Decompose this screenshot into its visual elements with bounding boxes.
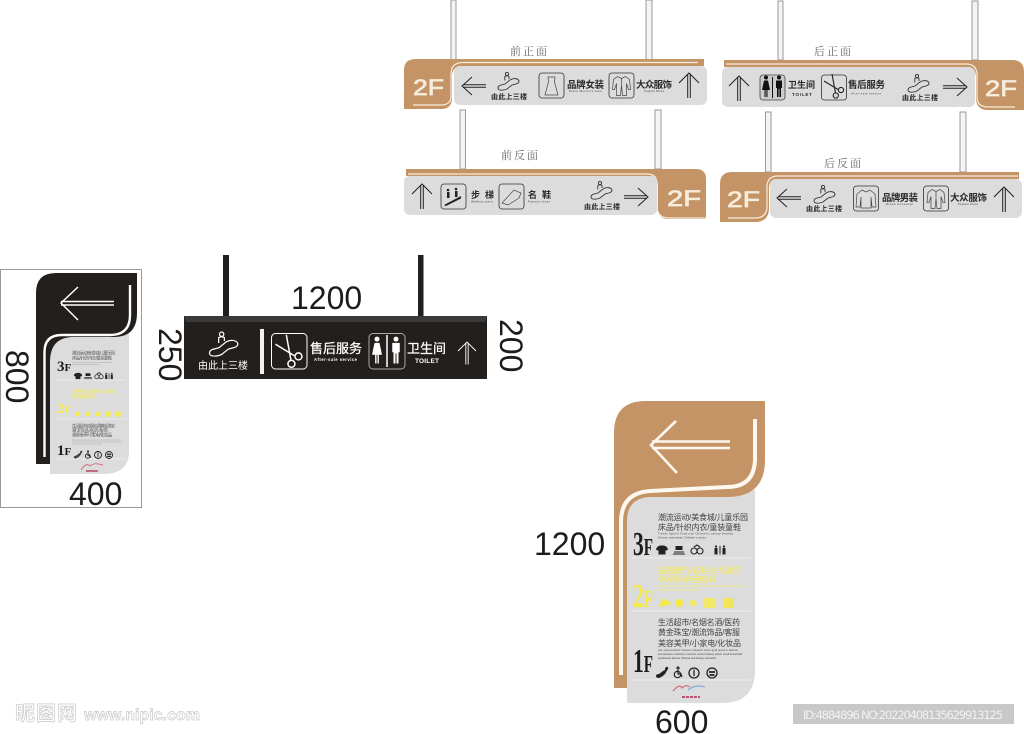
small black totem in frame: 休闲体验/箱包 <box>72 393 97 400</box>
top sign: front face (前正面) <box>404 0 707 109</box>
floor 3F: Trendy Sports/ Food city/ Children's outing/ bedding <box>658 532 734 536</box>
small black totem in frame: 2F <box>57 401 72 417</box>
floor 2F (yellow) <box>633 565 746 615</box>
floor 1F: accessories/ medicine/ customer center/ beauty salon/ small household <box>658 652 743 656</box>
large bronze totem <box>614 401 765 703</box>
top sign: front reverse (前反面): Walking stairs <box>471 200 494 204</box>
top sign: rear face (后正面): 后正面 <box>814 43 851 59</box>
small black totem in frame: 品牌服饰/名鞋/大众服饰 <box>72 388 116 395</box>
small black totem in frame: 1F <box>57 443 72 459</box>
top sign: rear reverse (后反面): 由此上三楼 <box>806 204 842 213</box>
floor 3F <box>633 512 748 563</box>
black hanging sign: After-sale service <box>314 357 358 362</box>
black hanging sign: 由此上三楼 <box>198 359 248 372</box>
top sign: rear face (后正面): 由此上三楼 <box>902 93 938 102</box>
floor 2F (yellow): 休闲体验/箱包皮具 <box>658 574 716 584</box>
top sign: rear reverse (后反面) <box>720 112 1022 222</box>
watermark: nipic: 昵图网 <box>15 703 77 725</box>
top sign: front face (前正面): 由此上三楼 <box>491 92 527 101</box>
floor 1F: 美容美甲/小家电/化妆品 <box>658 638 741 648</box>
id bar <box>793 704 1014 724</box>
brand logo <box>673 686 705 697</box>
top sign: rear reverse (后反面): Brand menswear <box>886 202 913 206</box>
watermark: nipic <box>15 703 200 725</box>
top sign: front reverse (前反面): 名 鞋 <box>528 189 551 200</box>
top sign: front face (前正面): 大众服饰 <box>636 79 672 91</box>
top sign: front face (前正面): 前正面 <box>510 43 547 59</box>
top sign: front face (前正面): Popular Dress <box>644 89 665 93</box>
floor 2F (yellow): 品牌服饰/名鞋/大众服饰 <box>658 565 742 575</box>
black hanging sign: TOILET <box>415 358 439 365</box>
small black totem in frame: 3F <box>57 359 72 375</box>
floor 1F: 黄金珠宝/潮流饰品/客服 <box>658 627 740 637</box>
floor 3F: 3F <box>633 526 653 563</box>
floor 3F: 潮流运动/美食城/儿童乐园 <box>658 512 748 522</box>
floor 1F <box>633 617 743 680</box>
floor 3F: 床品/针织内衣/童装童鞋 <box>658 522 741 532</box>
top sign: front face (前正面): 品牌女装 <box>567 79 604 91</box>
small black totem in frame: 美容美甲/小家电/化妆品 <box>72 432 112 438</box>
floor 1F: Life supermarket/ Famous tobacco/ wine/ gold jewelry/ fashion <box>658 648 739 652</box>
small black totem in frame <box>0 270 142 508</box>
dimension: 400: 400 <box>69 476 122 512</box>
black hanging sign: 售后服务 <box>310 341 362 356</box>
dimension: 250: 250 <box>152 328 188 381</box>
floor 2F (yellow): 2F <box>633 578 653 615</box>
top sign: rear reverse (后反面): 2F <box>727 187 760 212</box>
small black totem in frame: 潮流饰品/医药/服饰 <box>72 427 109 434</box>
top sign: front reverse (前反面) <box>404 110 706 219</box>
top sign: rear reverse (后反面): Popular Dress <box>958 202 979 206</box>
id bar: ID:4884896 NO:20220408135629913125 <box>803 708 1003 722</box>
top sign: rear face (后正面): 卫生间 <box>788 79 815 90</box>
top sign: front reverse (前反面): 由此上三楼 <box>584 202 620 211</box>
small black totem in frame: 床品/针织内衣/童装童鞋 <box>72 354 113 362</box>
floor 1F: 1F <box>633 643 653 680</box>
floor 3F: Knitted underwear/ Children's shoes <box>658 536 707 540</box>
watermark: nipic: www.nipic.com <box>83 707 200 724</box>
dimension: 1200 beside totem: 1200 <box>534 526 605 562</box>
floor 1F: appliances/ famous Chinese and foreign cosmetics <box>658 656 717 660</box>
top sign: front reverse (前反面): 前反面 <box>501 147 538 163</box>
top sign: rear reverse (后反面): 品牌男装 <box>882 192 918 204</box>
black hanging sign <box>184 255 487 379</box>
top sign: front reverse (前反面): 步 梯 <box>471 189 494 200</box>
black hanging sign: 卫生间 <box>407 341 446 356</box>
small black totem in frame: 生活超市/名烟名酒/黄金珠宝 <box>72 422 116 430</box>
top sign: rear face (后正面): After-sale service <box>851 92 881 96</box>
top sign: rear face (后正面) <box>722 1 1024 110</box>
top sign: rear face (后正面): 售后服务 <box>848 79 885 91</box>
dimension: 800: 800 <box>0 350 35 403</box>
top sign: front face (前正面): Brand Women's wear <box>569 89 602 93</box>
top sign: rear reverse (后反面): 后反面 <box>824 155 861 171</box>
dimension: 1200 over black sign: 1200 <box>291 280 362 316</box>
top sign: rear reverse (后反面): 大众服饰 <box>950 192 987 204</box>
top sign: front reverse (前反面): Famous shoes <box>528 200 551 204</box>
top sign: rear face (后正面): 2F <box>985 76 1017 101</box>
top sign: front reverse (前反面): 2F <box>667 186 701 211</box>
dimension: 200: 200 <box>493 319 529 372</box>
top sign: front face (前正面): 2F <box>413 75 444 100</box>
floor 1F: 生活超市/名烟名酒/医药 <box>658 617 740 627</box>
small black totem in frame: 潮流运动/美食城/儿童乐园 <box>72 350 115 356</box>
top sign: rear face (后正面): TOILET <box>792 92 812 97</box>
